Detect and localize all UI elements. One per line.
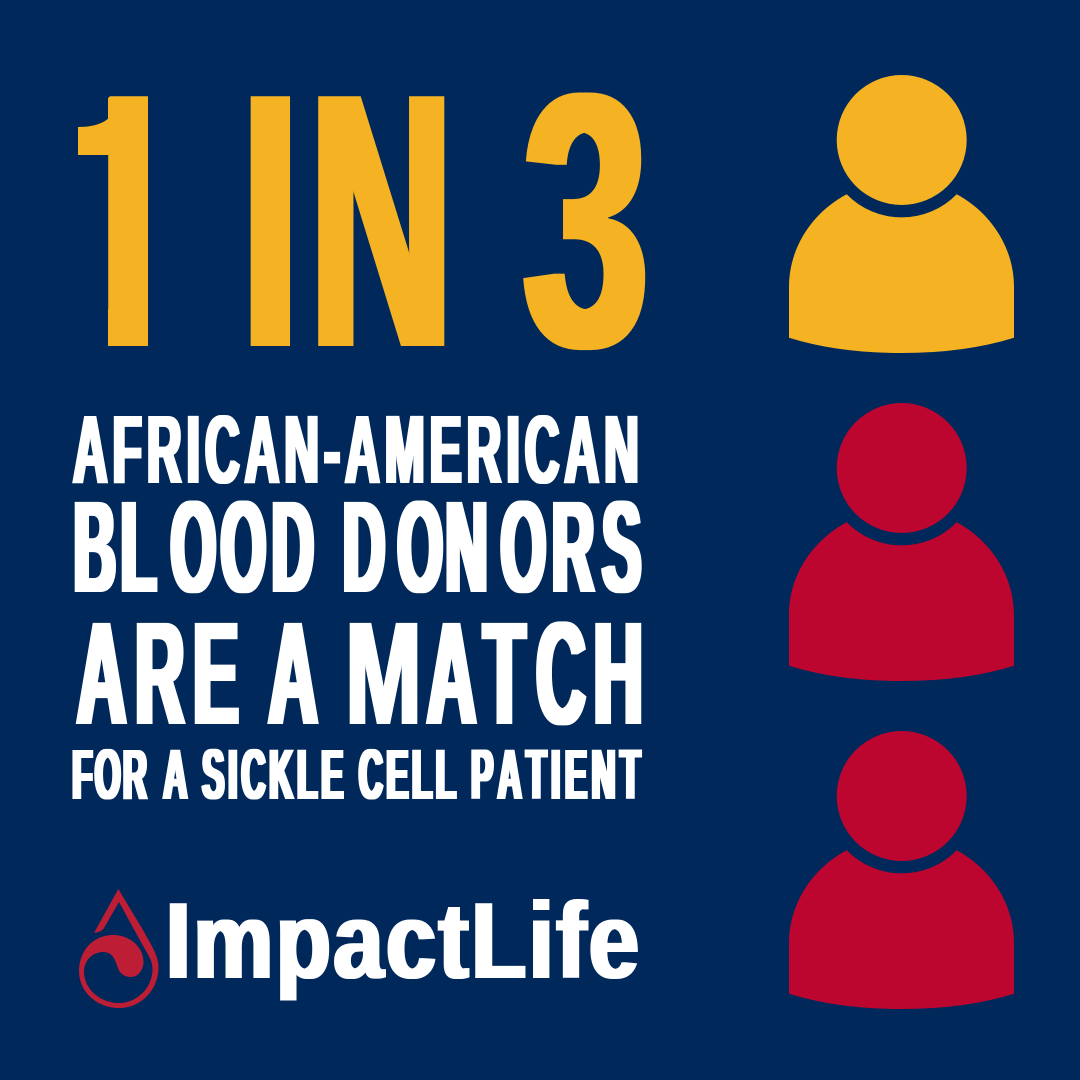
- line: Are a match: A: [268, 592, 318, 756]
- word IN: N: [310, 17, 453, 423]
- line: For a sickle cell patient: SICKLE: [202, 735, 347, 814]
- line: Blood donors: DONORS: [343, 474, 641, 620]
- line: Are a match: [77, 591, 643, 756]
- line: African-American: AFRICAN-AMERICAN: [73, 397, 644, 505]
- line: For a sickle cell patient: CELL: [359, 735, 460, 814]
- line: Are a match: ATCH: [427, 592, 643, 756]
- line: For a sickle cell patient: A: [163, 735, 187, 814]
- number 1: 1: [59, 17, 188, 423]
- infographic canvas: [72, 75, 1014, 1009]
- line: For a sickle cell patient: FOR: [72, 735, 149, 814]
- line: Are a match: ARE: [77, 592, 239, 756]
- word IN: [242, 17, 453, 424]
- statement text: [72, 397, 645, 814]
- logo: ImpactLife: [79, 881, 642, 1008]
- icon: gold person: [789, 75, 1014, 353]
- logo wordmark: ImpactLife: [166, 881, 641, 1002]
- number 3: 3: [523, 18, 648, 424]
- line: Blood donors: BLOOD: [74, 474, 314, 620]
- icon: red person: [789, 403, 1014, 681]
- line: Blood donors: [74, 474, 641, 620]
- line: For a sickle cell patient: [72, 735, 645, 814]
- line: Are a match: M: [346, 591, 421, 755]
- icon: blood drop: [79, 889, 158, 1008]
- number 1: [78, 96, 148, 346]
- icon: red person: [789, 731, 1014, 1009]
- word IN: I: [242, 18, 299, 424]
- title: 1 in 3: [59, 17, 648, 424]
- line: For a sickle cell patient: PATIENT: [471, 735, 645, 814]
